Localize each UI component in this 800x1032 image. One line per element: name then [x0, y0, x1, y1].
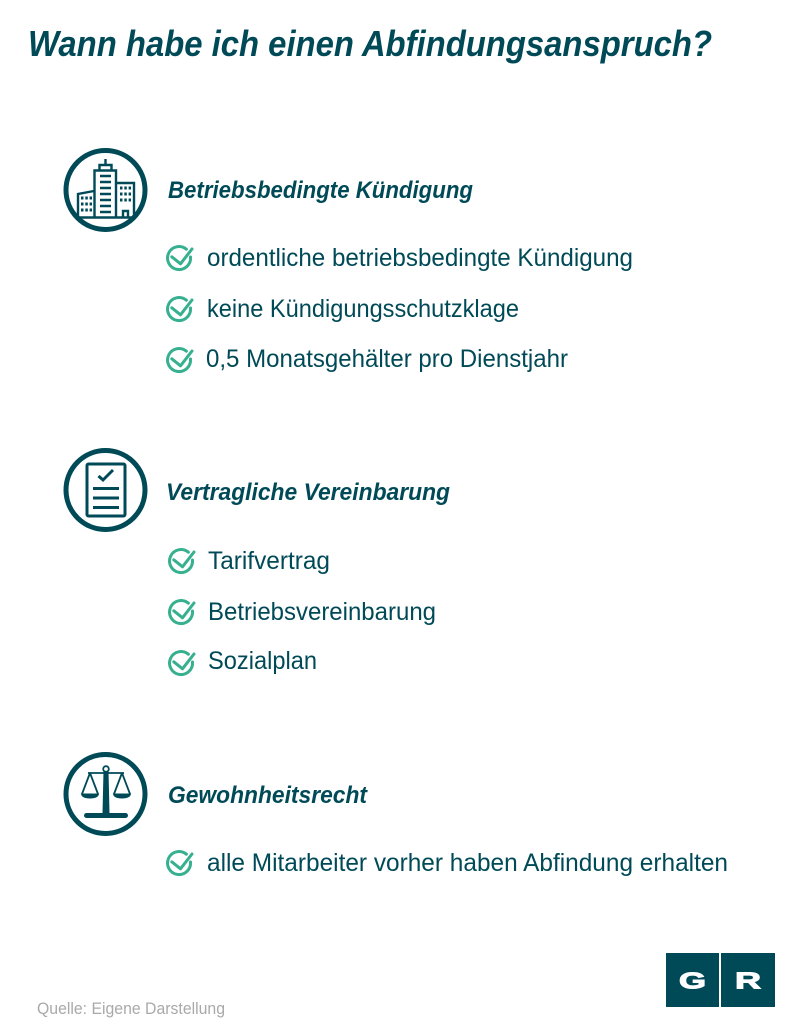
list item 3: 0,5 Monatsgehälter pro Dienstjahr: [206, 345, 568, 373]
icon: scales of justice: [66, 754, 145, 834]
icon: office buildings: [66, 150, 145, 230]
panel: Gewohnheitsrecht: [66, 754, 728, 877]
list item 1: alle Mitarbeiter vorher haben Abfindung erhalten: [207, 849, 728, 877]
list item 1: ordentliche betriebsbedingte Kündigung: [207, 244, 633, 272]
list item 3: Sozialplan: [208, 647, 317, 675]
list item 2: keine Kündigungsschutzklage: [207, 295, 519, 323]
icon: contract document: [66, 450, 145, 530]
title: Wann habe ich einen Abfindungsanspruch?: [28, 23, 712, 64]
logo: GR: R: [735, 968, 762, 994]
list item 2: Betriebsvereinbarung: [208, 598, 436, 626]
heading: Gewohnheitsrecht: [168, 782, 368, 809]
logo: GR: G: [679, 968, 706, 994]
logo: GR: [666, 953, 775, 1007]
heading: Betriebsbedingte Kündigung: [168, 177, 473, 204]
source note: Quelle: Eigene Darstellung: [37, 999, 225, 1018]
panel: Betriebsbedingte Kündigung: [66, 150, 633, 373]
list item 1: Tarifvertrag: [208, 547, 330, 575]
heading: Vertragliche Vereinbarung: [166, 479, 450, 506]
panel: Vertragliche Vereinbarung: [66, 450, 450, 675]
